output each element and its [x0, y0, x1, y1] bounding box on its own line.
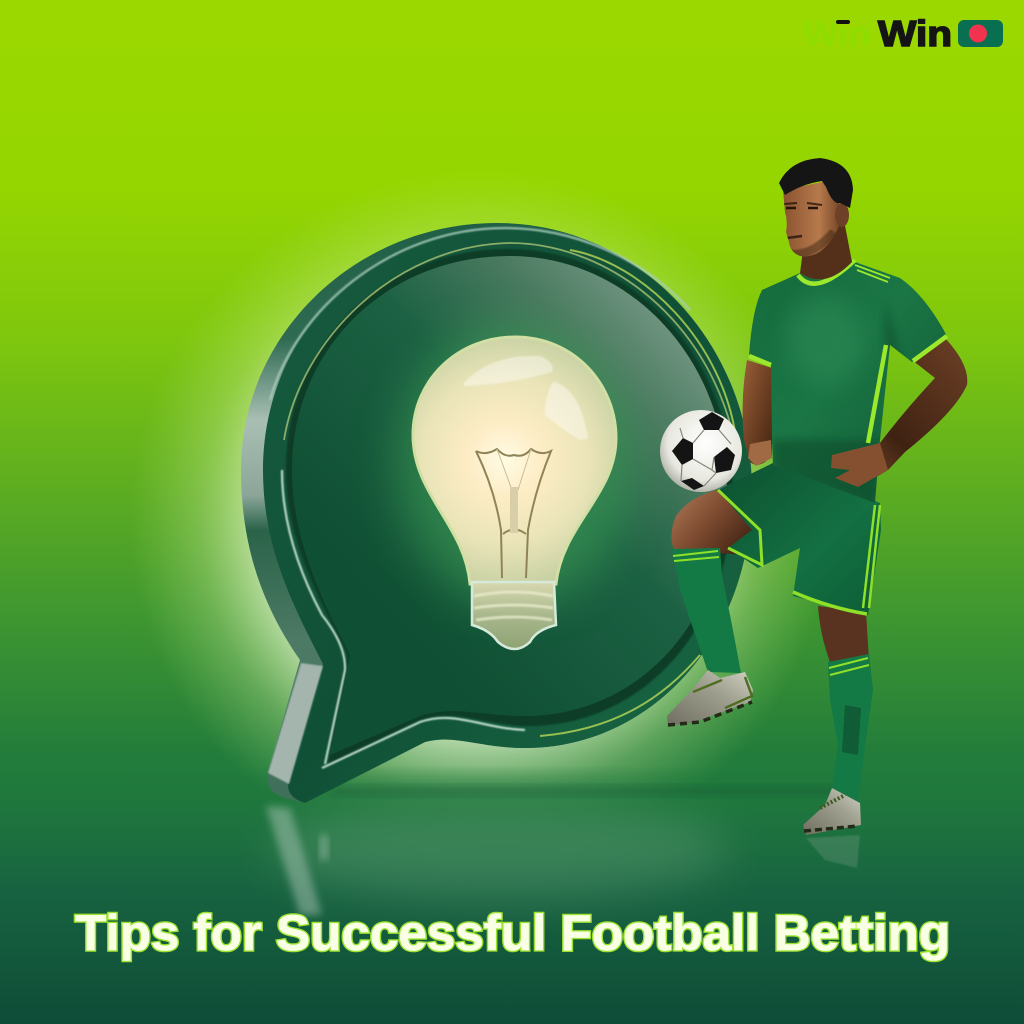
raised thigh [671, 488, 770, 556]
silver tail facet [268, 663, 323, 784]
floor reflection of bubble tail [266, 806, 328, 915]
olive rim line [284, 243, 732, 440]
shorts [718, 462, 881, 615]
shirt lime trim [749, 260, 947, 443]
socks raised leg [672, 548, 741, 673]
brand logo [803, 13, 1003, 54]
facial features [784, 203, 834, 254]
right hand fingers [831, 443, 888, 487]
bright rim edge [282, 470, 525, 768]
raised boot [667, 670, 753, 726]
reflective floor [0, 765, 1024, 1024]
bubble side extrusion [241, 223, 752, 803]
light bulb [397, 325, 633, 649]
sock stripes [673, 551, 719, 561]
ear [835, 203, 849, 227]
bubble inner face [292, 256, 727, 755]
shorts trim [718, 490, 880, 614]
football [660, 410, 742, 492]
right arm and hand [832, 338, 967, 488]
logo faint word: Win [803, 13, 871, 54]
bulb screw base [472, 582, 556, 649]
lime accent line [540, 250, 737, 736]
rim dark groove [286, 249, 733, 764]
standing boot [803, 788, 861, 835]
bubble front rim [263, 226, 752, 803]
flag of Bangladesh [958, 20, 1003, 47]
bulb glass [413, 337, 616, 584]
glass highlights [463, 356, 588, 440]
left hand [748, 440, 772, 466]
bulb halo [397, 325, 633, 605]
title: Tips for Successful Football Betting [75, 905, 950, 961]
left arm [743, 360, 772, 465]
speech bubble [241, 223, 752, 803]
boot reflection [806, 835, 860, 868]
rim outer sheen [270, 228, 690, 400]
shirt shading [772, 295, 905, 505]
logo dash [836, 20, 850, 24]
logo black word: Win [878, 13, 952, 54]
filament [476, 449, 551, 578]
football player [660, 158, 967, 868]
standing leg [818, 606, 869, 662]
hair [779, 158, 853, 208]
shirt [749, 262, 947, 503]
white glow behind speech bubble [60, 100, 900, 840]
socks standing leg [828, 654, 873, 800]
face [783, 180, 843, 256]
title: Tips for Successful Football Betting [75, 905, 950, 961]
neck [800, 215, 852, 279]
sock stripes and shin panel [829, 658, 869, 755]
